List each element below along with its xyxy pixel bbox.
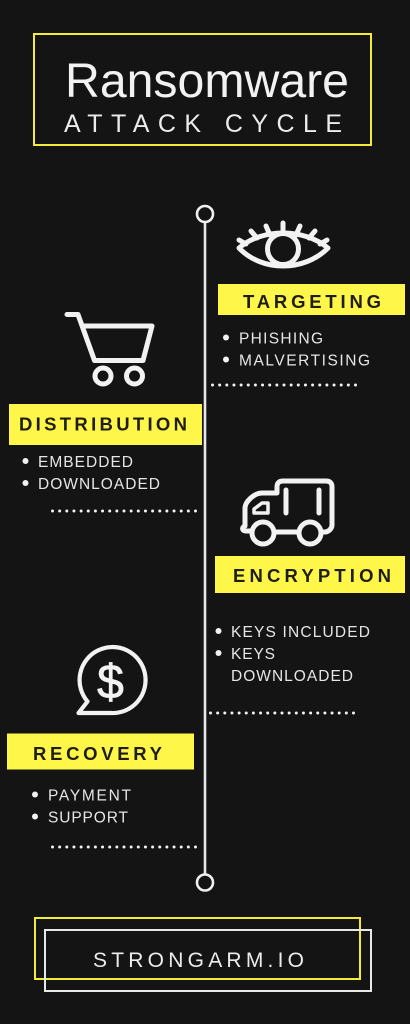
footer: strongarm.io: STRONGARM.IO	[93, 949, 304, 972]
title frame	[34, 34, 371, 145]
panel: targeting: TARGETING	[243, 291, 381, 312]
bullet list: targeting: MALVERTISING	[239, 352, 370, 370]
panel: distribution: DISTRIBUTION	[19, 414, 187, 434]
heading bar: distribution	[9, 404, 202, 445]
panel: encryption	[210, 481, 405, 713]
bullet list: distribution: EMBEDDED	[38, 454, 133, 471]
panel: encryption: ENCRYPTION	[233, 565, 391, 586]
icon: dollar speech bubble: $	[97, 656, 124, 709]
icon: dollar speech bubble	[78, 647, 146, 713]
panel: recovery	[7, 647, 197, 847]
heading bar: targeting	[218, 284, 405, 315]
subtitle: Attack Cycle: ATTACK CYCLE	[64, 110, 342, 138]
footer: strongarm.io	[35, 918, 371, 991]
icon: shopping cart	[67, 314, 152, 384]
bullet list: recovery: PAYMENT	[48, 788, 132, 804]
bullet list: encryption: KEYS INCLUDED	[231, 624, 370, 641]
panel: distribution	[9, 314, 202, 511]
bullet list: recovery	[32, 788, 132, 826]
bullet list: distribution	[22, 454, 160, 493]
title block	[34, 34, 371, 145]
title: Ransomware: Ransomware	[65, 55, 349, 108]
icon: truck	[243, 481, 332, 544]
bullet list: encryption: KEYS	[231, 646, 275, 663]
bullet list: targeting	[223, 330, 370, 370]
panel: recovery: RECOVERY	[33, 743, 163, 764]
bullet list: encryption	[216, 624, 370, 685]
icon: eye	[239, 223, 328, 266]
panel: targeting	[212, 223, 405, 385]
heading bar: recovery	[7, 734, 194, 770]
bullet list: targeting: PHISHING	[239, 330, 323, 348]
heading bar: encryption	[215, 556, 405, 593]
timeline	[197, 206, 213, 890]
bullet list: encryption: DOWNLOADED	[231, 668, 353, 685]
bullet list: distribution: DOWNLOADED	[38, 476, 160, 493]
bullet list: recovery: SUPPORT	[48, 810, 129, 826]
